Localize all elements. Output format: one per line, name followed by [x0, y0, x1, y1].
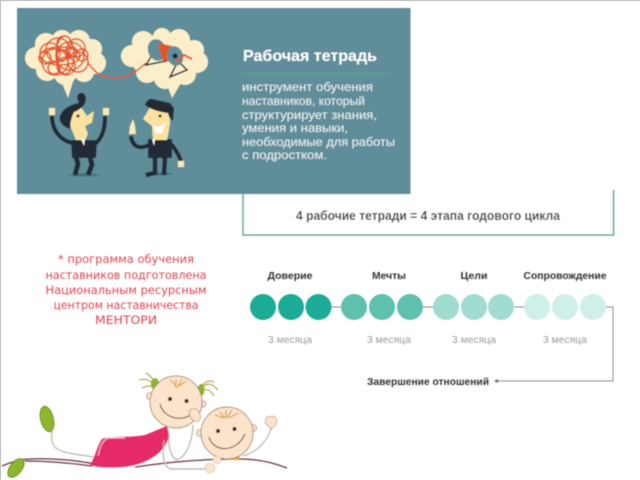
text block: workbook description: инструмент обучения: [242, 80, 373, 94]
title: workbook: Рабочая тетрадь: [243, 48, 377, 65]
stage: goals: Цели: [460, 271, 488, 282]
connector lines and return arrow: [331, 307, 613, 381]
label: end of relationship: Завершение отношений: [367, 377, 489, 388]
text block: mentor programme note: Национальным ресурсным: [46, 283, 206, 297]
girl pink dress: [90, 426, 169, 467]
icon: left thought cloud: [25, 30, 106, 98]
text block: workbook description: структурирует знания,: [242, 108, 377, 122]
icon: left man: [49, 93, 109, 176]
stage: support: [524, 271, 607, 346]
icon: right thought cloud: [121, 28, 208, 98]
stage: support: 3 месяца: [543, 334, 587, 346]
branch: [2, 459, 287, 468]
stage: trust: 3 месяца: [268, 334, 312, 346]
panel: workbook intro: [17, 8, 410, 194]
text block: mentor programme note: * программа обучения: [58, 252, 194, 266]
illustration: two smiling children: [2, 373, 287, 480]
stage: dreams: [341, 271, 423, 346]
text block: workbook description: [242, 80, 395, 162]
illustration: two men with thought clouds: [25, 28, 208, 176]
text block: workbook description: умения и навыки,: [242, 121, 348, 135]
icon: thread spool: [145, 37, 192, 77]
stage: dreams: 3 месяца: [367, 334, 411, 346]
stage: support: Сопровождение: [524, 271, 607, 282]
stage: goals: 3 месяца: [452, 334, 496, 346]
stage: dreams: Мечты: [372, 271, 406, 282]
girl head: [139, 373, 218, 428]
text block: workbook description: необходимые для работы: [242, 135, 395, 149]
text block: mentor programme note: МЕНТОРИ: [95, 313, 157, 327]
child: [196, 407, 277, 464]
text block: workbook description: с подростком.: [242, 148, 327, 162]
stage: trust: Доверие: [268, 271, 313, 282]
icon: tangled thread: [39, 36, 146, 78]
icon: right man: [129, 99, 184, 176]
girl legs and feet: [4, 405, 95, 480]
heading: four workbooks: 4 рабочие тетради = 4 этапа годового цикла: [296, 209, 561, 223]
girl arms: [163, 425, 205, 469]
panel: cycle heading box: [243, 190, 614, 235]
text block: mentor programme note: наставников подготовлена: [46, 268, 206, 282]
text block: mentor programme note: [46, 252, 206, 327]
chart: yearly cycle timeline: [250, 271, 613, 388]
text block: mentor programme note: центром наставничества: [54, 298, 198, 312]
text block: workbook description: наставников, который: [242, 94, 365, 108]
stage: trust: [250, 271, 332, 346]
stage: goals: [433, 271, 514, 346]
